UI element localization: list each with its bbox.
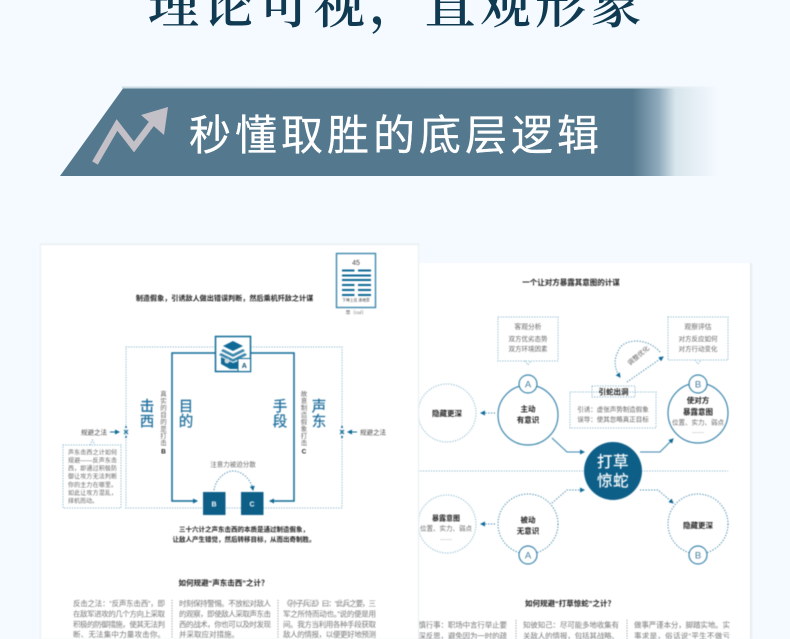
circle: A active bbox=[498, 375, 558, 445]
caption: 让敌人产生错觉，然后转移目标，从而出奇制胜。 bbox=[172, 534, 316, 544]
box: B bbox=[203, 492, 226, 515]
icon: pagoda with A tag bbox=[216, 336, 250, 372]
arc arrow: B to C bbox=[214, 471, 253, 490]
box: lure the snake: 引诱：虚张声势制造假象 bbox=[577, 404, 649, 414]
vertical text: real target: 是 bbox=[160, 425, 167, 433]
circle: B exposed: 位置、实力、弱点 bbox=[672, 418, 724, 426]
vertical text: real target: 的 bbox=[160, 403, 167, 412]
callout: countermeasure: 如此让攻方混乱， bbox=[68, 489, 117, 497]
circle: B exposed: …… bbox=[692, 429, 704, 435]
circle: B exposed: 使对方 bbox=[687, 395, 710, 405]
icon: pagoda with A tag: A bbox=[242, 363, 247, 370]
arrow: to hide deeper bbox=[481, 412, 495, 414]
diagram bbox=[63, 336, 386, 515]
solid frame with arrows bbox=[172, 353, 294, 501]
panel: left page bbox=[40, 244, 419, 639]
column 3 bbox=[283, 598, 376, 639]
arc: adjust and optimise: 调整优化 bbox=[625, 343, 651, 367]
column 1: 在敌军进攻的几个方向上采取 bbox=[73, 608, 166, 618]
circle: B hide deeper: 隐藏更深 bbox=[683, 520, 713, 530]
box: lure the snake: 引蛇出洞 bbox=[598, 386, 629, 396]
arrow: solid upper right bbox=[640, 439, 673, 452]
left countermeasure marker: 规避之法 bbox=[81, 428, 108, 436]
vertical text: feint target: 制 bbox=[301, 403, 308, 412]
left page heading: 制造假象，引诱敌人做出错误判断，然后乘机歼敌之计谋 bbox=[136, 294, 313, 302]
label: feint east: 东 bbox=[312, 414, 326, 430]
label: feint east: 声 bbox=[312, 398, 326, 416]
circle: A active: 有意识 bbox=[517, 414, 540, 424]
right page heading: 一个让对方暴露其意图的计谋 bbox=[522, 277, 620, 287]
circle: B exposed: 暴露意图 bbox=[683, 406, 713, 416]
circle: expose intent: 位置、实力、弱点 bbox=[420, 524, 472, 532]
column 2: 西的战术，你也可以及时发现 bbox=[179, 619, 272, 629]
callout: countermeasure: 择机而动。 bbox=[68, 497, 98, 505]
column 1: 积极的防御措施，使其无法判 bbox=[73, 619, 165, 629]
right countermeasure marker bbox=[340, 426, 386, 438]
vertical text: real target: 实 bbox=[160, 396, 167, 405]
box: B: B bbox=[211, 502, 217, 508]
hexagram card: 萃（cuì） bbox=[346, 309, 366, 316]
label: attention scattered: 注意力被迫分散 bbox=[210, 460, 256, 468]
box: C: C bbox=[249, 502, 255, 508]
vertical text: real target: 击 bbox=[160, 438, 167, 447]
circle: B hide deeper bbox=[668, 494, 728, 564]
arrow: dotted lower left bbox=[552, 490, 584, 503]
left countermeasure marker bbox=[81, 426, 128, 438]
circle: A active: A bbox=[525, 380, 532, 390]
label: strike west bbox=[140, 398, 154, 430]
label: feint east bbox=[312, 398, 326, 430]
box: observe and evaluate: 对方行动变化 bbox=[678, 344, 718, 353]
hexagram card: 下坤上兑 泽地萃 bbox=[342, 298, 370, 302]
banner heading: 秒懂取胜的底层逻辑 bbox=[189, 112, 603, 159]
column 1: 反击之法：“反声东击西”，即 bbox=[73, 598, 165, 608]
label: means: 段 bbox=[273, 414, 287, 430]
circle: expose intent: …… bbox=[440, 536, 452, 542]
box: observe and evaluate: 观察评估 bbox=[684, 322, 712, 331]
hexagram card bbox=[336, 254, 376, 316]
divider bbox=[418, 470, 728, 472]
callout: countermeasure: 规避——反声东击 bbox=[68, 456, 117, 464]
vertical text: feint target: C bbox=[302, 448, 307, 456]
vertical text: feint target: 击 bbox=[301, 438, 308, 447]
column 2 bbox=[179, 598, 272, 639]
arrow: dotted lower right bbox=[640, 490, 673, 503]
box: objective analysis: 客观分析 bbox=[514, 322, 542, 331]
right page body text: 做事严谨本分，脚踏实地。实 bbox=[634, 620, 730, 630]
left page subheading: 如何规避“声东击西”之计？ bbox=[178, 578, 268, 588]
label: goal bbox=[179, 400, 193, 430]
callout: countermeasure: 西，即通过积极防 bbox=[68, 464, 117, 472]
label: goal: 目 bbox=[179, 400, 193, 416]
box: observe and evaluate: 对方反应如何 bbox=[678, 334, 718, 343]
right page body text: 谨慎行事：职场中言行举止要 bbox=[411, 620, 508, 630]
column 2: 时刻保持警惕。不放松对敌人 bbox=[179, 598, 272, 608]
vertical text: feint target bbox=[301, 389, 308, 456]
label: means bbox=[273, 398, 287, 430]
box: C bbox=[241, 492, 264, 515]
circle: B exposed: B bbox=[695, 380, 701, 390]
column 2: 的观察，即使敌人采取声东击 bbox=[179, 608, 272, 618]
right page body text: 知彼知己：尽可能多地收集有 bbox=[523, 620, 620, 630]
circle: expose intent bbox=[418, 495, 476, 553]
vertical text: feint target: 造 bbox=[301, 410, 308, 419]
circle: A active: 主动 bbox=[520, 404, 536, 414]
box: objective analysis bbox=[498, 317, 558, 365]
right page subheading: 如何规避“打草惊蛇”之计？ bbox=[525, 598, 615, 608]
box: objective analysis: 双方环境因素 bbox=[508, 344, 548, 353]
hexagram card: 45 bbox=[352, 260, 360, 267]
right countermeasure marker: 规避之法 bbox=[360, 428, 386, 436]
callout: countermeasure bbox=[63, 440, 121, 508]
box: objective analysis: 双方优劣态势 bbox=[508, 334, 548, 343]
circle: hide deeper bbox=[418, 384, 476, 442]
dotted frame bbox=[126, 347, 342, 508]
arc: adjust and optimise bbox=[615, 341, 663, 382]
vertical text: real target: 的 bbox=[160, 417, 167, 426]
circle: hide deeper: 隐藏更深 bbox=[432, 408, 462, 418]
column 3: 军之所恃而动也。”说的便是用 bbox=[283, 608, 376, 618]
vertical text: real target: 目 bbox=[160, 411, 167, 419]
label: means: 手 bbox=[273, 398, 287, 416]
column 1: 断、无法集中力量攻击你。 bbox=[73, 629, 165, 639]
vertical text: feint target: 象 bbox=[301, 424, 308, 433]
caption: 三十六计之声东击西的本质是通过制造假象， bbox=[179, 524, 309, 534]
label: strike west: 西 bbox=[140, 414, 154, 430]
vertical text: feint target: 故 bbox=[301, 389, 308, 398]
column 3: 间。我方当利用各种手段获取 bbox=[283, 619, 376, 629]
vertical text: feint target: 意 bbox=[301, 396, 308, 405]
label: goal: 的 bbox=[179, 414, 193, 430]
column 2: 并采取应对措施。 bbox=[179, 629, 239, 639]
vertical text: feint target: 假 bbox=[301, 417, 308, 426]
callout: countermeasure: 御让攻方无法判断 bbox=[68, 472, 117, 480]
box: lure the snake: 误导：使其忽略真正目标 bbox=[577, 414, 649, 424]
label: strike west: 击 bbox=[140, 398, 154, 416]
box: observe and evaluate bbox=[668, 317, 728, 364]
circle: expose intent: 暴露意图 bbox=[432, 514, 460, 522]
centre circle bbox=[584, 442, 642, 500]
circle: A passive bbox=[498, 494, 558, 564]
right page body text bbox=[411, 620, 730, 639]
column 1 bbox=[73, 598, 166, 639]
circle: B exposed bbox=[668, 375, 728, 443]
box: lure the snake bbox=[570, 386, 656, 428]
vertical text: feint target: 打 bbox=[301, 431, 308, 440]
callout: countermeasure: 你的主力在哪里。 bbox=[68, 481, 117, 489]
banner bbox=[60, 86, 718, 176]
centre circle: 惊蛇 bbox=[597, 472, 629, 490]
callout: countermeasure: 声东击西之计如何 bbox=[68, 448, 117, 456]
left page body text bbox=[73, 598, 376, 639]
circle: A passive: 被动 bbox=[520, 514, 536, 524]
circle: A passive: A bbox=[525, 550, 532, 562]
vertical text: real target: B bbox=[161, 448, 166, 456]
centre circle: 打草 bbox=[597, 453, 629, 471]
column 3: 《孙子兵法》曰：“此兵之要，三 bbox=[283, 598, 376, 608]
vertical text: real target: 打 bbox=[160, 431, 167, 440]
circle: B hide deeper: B bbox=[695, 550, 701, 562]
icon: rising arrow bbox=[95, 107, 168, 163]
panel: right page bbox=[411, 263, 752, 639]
column 3: 敌人的情报，以便更好地预测 bbox=[283, 629, 376, 639]
vertical text: real target: 真 bbox=[160, 389, 167, 398]
caption bbox=[172, 524, 316, 544]
arrow: solid upper left bbox=[552, 438, 584, 452]
vertical text: real target bbox=[160, 389, 167, 456]
circle: A passive: 无意识 bbox=[517, 526, 540, 536]
arrow: to expose intent bbox=[481, 523, 495, 525]
